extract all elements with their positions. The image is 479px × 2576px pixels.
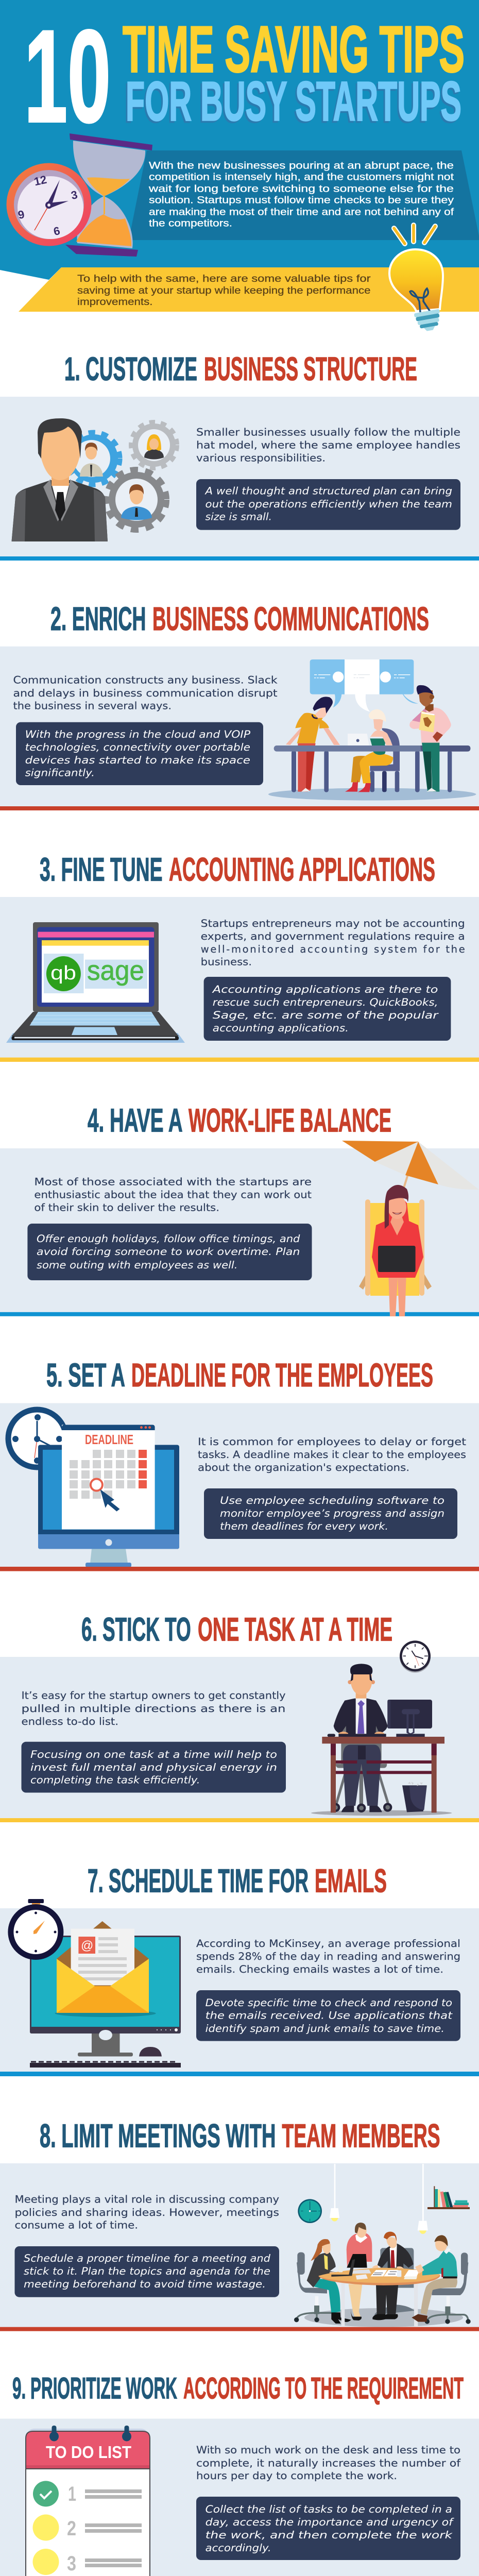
text 5 bbox=[198, 1436, 466, 1473]
text 4: enthusiastic about the idea that they can work out bbox=[34, 1189, 312, 1201]
section 8 bbox=[0, 2117, 479, 2331]
callout 9 bbox=[196, 2497, 460, 2560]
callout 9: accordingly. bbox=[206, 2542, 271, 2554]
callout 1: A well thought and structured plan can bring bbox=[204, 485, 452, 497]
callout 2: With the progress in the cloud and VOIP bbox=[25, 728, 250, 740]
callout 7: Devote specific time to check and respond to bbox=[206, 1997, 452, 2009]
intro text: competition is intensely high, and the customers might not bbox=[149, 172, 454, 183]
title bbox=[24, 3, 465, 150]
text 3: well-monitored accounting system for the bbox=[201, 943, 465, 955]
wall clock bbox=[298, 2199, 322, 2223]
text 8: policies and sharing ideas. However, meetings bbox=[14, 2207, 279, 2218]
text 2: the business in several ways. bbox=[13, 700, 172, 711]
icon: hourglass bbox=[65, 133, 152, 257]
callout 6: invest full mental and physical energy in bbox=[30, 1761, 277, 1773]
yellow band text: saving time at your startup while keeping the performance bbox=[77, 285, 371, 296]
seated person bbox=[345, 709, 393, 792]
section 6 bbox=[0, 1611, 479, 1822]
checked item: 1 bbox=[68, 2483, 76, 2505]
text 7: According to McKinsey, an average professional bbox=[196, 1938, 460, 1950]
callout 5: monitor employee’s progress and assign bbox=[220, 1507, 444, 1519]
intro text: With the new businesses pouring at an abrupt pace, the bbox=[149, 160, 454, 172]
illustration: man at desk bbox=[311, 1640, 452, 1816]
desk monitor bbox=[387, 1700, 432, 1737]
chair behind center man bbox=[374, 2248, 415, 2315]
gear: light grey bbox=[131, 422, 177, 468]
section 7 bbox=[0, 1862, 479, 2076]
callout 2: technologies, connectivity over portable bbox=[25, 741, 250, 753]
floor shadow bbox=[311, 1810, 452, 1816]
deadline calendar: DEADLINE bbox=[85, 1432, 133, 1447]
section 3 bbox=[0, 851, 479, 1062]
desk bbox=[322, 1737, 444, 1812]
beach chair bbox=[359, 1199, 432, 1296]
right person bbox=[409, 685, 451, 792]
text 4: of their skin to deliver the results. bbox=[34, 1201, 219, 1214]
item 2: 2 bbox=[67, 2517, 76, 2540]
yellow intro band bbox=[19, 267, 479, 312]
left person bbox=[286, 697, 340, 792]
text 3 bbox=[201, 918, 465, 968]
callout 2 bbox=[16, 722, 263, 785]
text 5: about the organization's expectations. bbox=[198, 1462, 409, 1473]
callout 7: identify spam and junk emails to save time. bbox=[206, 2023, 444, 2035]
clock numerals bbox=[17, 173, 79, 238]
heading 9: 9. PRIORITIZE WORK bbox=[12, 2372, 177, 2405]
callout 4: Offer enough holidays, follow office timings, and bbox=[37, 1233, 300, 1245]
yellow band text: To help with the same, here are some valuable tips for bbox=[77, 273, 371, 284]
text 8: Meeting plays a vital role in discussing company bbox=[14, 2194, 279, 2206]
waste bin bbox=[402, 1782, 427, 1812]
text 1 bbox=[196, 427, 460, 464]
illustration: email on monitor bbox=[11, 1899, 181, 2067]
illustration: laptop with accounting logos bbox=[6, 922, 185, 1043]
speech bubbles bbox=[310, 659, 418, 712]
item 2 bbox=[33, 2514, 142, 2541]
chair left bbox=[294, 2252, 331, 2322]
man right bbox=[412, 2235, 457, 2322]
item 3: 3 bbox=[67, 2552, 76, 2575]
callout 1: out the operations efficiently when the team bbox=[205, 498, 452, 510]
text 1: various responsibilities. bbox=[196, 452, 326, 464]
gear: dark grey bbox=[107, 470, 166, 530]
icon: light bulb bbox=[389, 225, 443, 333]
heading 4 bbox=[88, 1101, 391, 1139]
illustration: to do list bbox=[26, 2426, 150, 2576]
text 7: spends 28% of the day in reading and answering bbox=[196, 1951, 460, 1962]
heading 5: 5. SET A bbox=[46, 1357, 125, 1394]
chair bbox=[370, 728, 400, 792]
gear: blue bbox=[68, 433, 119, 484]
text 1: hat model, where the same employee handles bbox=[196, 439, 460, 451]
title number 10: 10 bbox=[24, 3, 111, 150]
header: blue background bbox=[0, 0, 479, 280]
callout 9: day, access the importance and urgency of bbox=[206, 2516, 455, 2528]
heading 2 bbox=[50, 600, 429, 637]
callout 3: Sage, etc. are some of the popular bbox=[213, 1009, 439, 1021]
callout 8: stick to it. Plan the topics and agenda for the bbox=[24, 2265, 270, 2277]
stopwatch bbox=[11, 1899, 61, 1957]
callout 1: size is small. bbox=[205, 511, 272, 523]
callout 2: devices has started to make its space bbox=[25, 754, 250, 766]
callout 5: Use employee scheduling software to bbox=[220, 1495, 444, 1506]
desk back legs and bars bbox=[336, 1760, 432, 1774]
text 9: complete, it naturally increases the number of bbox=[196, 2458, 461, 2469]
keyboard and mouse bbox=[328, 1734, 386, 1737]
table items bbox=[331, 2259, 420, 2280]
woman seated bbox=[307, 2239, 351, 2324]
text 9: With so much work on the desk and less time to bbox=[196, 2444, 460, 2456]
binder rings bbox=[49, 2426, 131, 2441]
callout 5: them deadlines for every work. bbox=[220, 1520, 388, 1532]
panel 2 background bbox=[0, 647, 479, 806]
heading 2: 2. ENRICH bbox=[50, 600, 146, 637]
callout 3: accounting applications. bbox=[213, 1022, 349, 1034]
text 7 bbox=[196, 1938, 460, 1975]
heading 1: 1. CUSTOMIZE bbox=[64, 350, 197, 387]
list title: TO DO LIST bbox=[46, 2443, 131, 2462]
intro text: the competitors. bbox=[149, 217, 232, 229]
text 3: Startups entrepreneurs may not be accounting bbox=[201, 918, 465, 929]
callout 2: significantly. bbox=[25, 767, 95, 779]
text 5: tasks. A deadline makes it clear to the employees bbox=[198, 1449, 466, 1461]
stripe 5 bbox=[0, 1567, 479, 1571]
heading 1 bbox=[64, 350, 417, 387]
clock numerals: 6 bbox=[53, 224, 61, 238]
section 9 bbox=[0, 2372, 479, 2576]
callout 5 bbox=[204, 1488, 457, 1539]
wall clock bbox=[8, 1410, 66, 1467]
clock numerals: 9 bbox=[17, 208, 26, 222]
text 3: business. bbox=[201, 956, 252, 968]
envelope bbox=[55, 1921, 156, 2017]
heading 7: 7. SCHEDULE TIME FOR bbox=[88, 1862, 309, 1899]
text 6: It’s easy for the startup owners to get constantly bbox=[22, 1690, 285, 1702]
checked item bbox=[33, 2481, 142, 2506]
yellow band text bbox=[77, 273, 371, 308]
text 8 bbox=[14, 2194, 279, 2231]
text 2: Communication constructs any business. Slack bbox=[13, 674, 278, 686]
callout 4: avoid forcing someone to work overtime. Plan bbox=[37, 1246, 300, 1258]
callout 3 bbox=[204, 977, 451, 1041]
text 4: Most of those associated with the startups are bbox=[34, 1176, 312, 1188]
callout 6 bbox=[22, 1742, 286, 1793]
heading 6: 6. STICK TO bbox=[81, 1611, 191, 1648]
man center bbox=[372, 2232, 414, 2320]
text 6: pulled in multiple directions as there is an bbox=[22, 1703, 285, 1715]
clock numerals: 3 bbox=[70, 188, 79, 202]
logo: sage: sage bbox=[87, 955, 144, 986]
wall clock bbox=[400, 1640, 431, 1673]
bookshelf bbox=[427, 2186, 470, 2209]
callout 9: the work, and then complete the work bbox=[206, 2529, 453, 2541]
section 5 bbox=[0, 1357, 479, 1571]
callout 7: the emails received. Use applications that bbox=[206, 2010, 453, 2022]
panel 9 background bbox=[0, 2419, 479, 2576]
text 5: It is common for employees to delay or forget bbox=[198, 1436, 466, 1448]
icon: alarm clock bbox=[6, 163, 92, 246]
stripe 8 bbox=[0, 2327, 479, 2331]
heading 3 bbox=[40, 851, 435, 888]
panel 4 background bbox=[0, 1148, 479, 1312]
computer bbox=[30, 1936, 181, 2067]
callout 1 bbox=[196, 479, 460, 530]
text 1: Smaller businesses usually follow the multiple bbox=[196, 427, 460, 438]
heading 9 bbox=[12, 2372, 464, 2405]
section 2 bbox=[0, 600, 479, 810]
panel 1 background bbox=[0, 397, 479, 556]
callout 9: Collect the list of tasks to be completed in a bbox=[206, 2503, 452, 2515]
callout 8: Schedule a proper timeline for a meeting and bbox=[24, 2252, 271, 2264]
table bbox=[274, 745, 470, 792]
section 4 bbox=[0, 1101, 479, 1316]
intro text: are making the most of their time and are not behind any of bbox=[149, 206, 454, 217]
text 7: emails. Checking emails wastes a lot of time. bbox=[196, 1963, 443, 1975]
mouse cursor bbox=[100, 1489, 119, 1512]
callout 4 bbox=[27, 1224, 312, 1280]
callout 3: Accounting applications are there to bbox=[211, 984, 438, 995]
man's legs bbox=[341, 1745, 382, 1812]
bars over legs bbox=[343, 1760, 381, 1774]
heading 6 bbox=[81, 1611, 392, 1648]
callout 8: meeting beforehand to avoid time wastage. bbox=[24, 2278, 266, 2290]
callout 3: rescue such entrepreneurs. QuickBooks, bbox=[213, 996, 438, 1008]
illustration: deadline calendar on monitor bbox=[8, 1410, 179, 1567]
section 1 bbox=[0, 350, 479, 561]
laptop bbox=[348, 734, 369, 745]
floor shadow bbox=[268, 788, 476, 801]
text 9 bbox=[196, 2444, 461, 2482]
callout 7 bbox=[196, 1990, 460, 2041]
hanging lamps bbox=[330, 2164, 428, 2234]
heading 3: 3. FINE TUNE bbox=[40, 851, 163, 888]
clock numerals: 12 bbox=[33, 173, 48, 188]
heading 8: 8. LIMIT MEETINGS WITH bbox=[40, 2117, 276, 2155]
deadline calendar bbox=[62, 1425, 155, 1529]
chair right bbox=[425, 2252, 471, 2324]
text 6: endless to-do list. bbox=[22, 1716, 118, 1727]
monitor bbox=[38, 1445, 179, 1567]
callout 6: Focusing on one task at a time will help to bbox=[30, 1749, 277, 1760]
logo: QuickBooks: qb bbox=[50, 962, 76, 984]
text 2: and delays in business communication disrupt bbox=[13, 687, 278, 699]
text 9: hours per day to complete the work. bbox=[196, 2470, 397, 2482]
intro text: solution. Startups must follow time checks to be sure they bbox=[149, 195, 454, 206]
man upper body bbox=[334, 1664, 388, 1737]
floor shadow bbox=[304, 2308, 463, 2327]
panel 6 background bbox=[0, 1657, 479, 1818]
businessman bbox=[11, 418, 108, 541]
heading 4: 4. HAVE A bbox=[88, 1101, 183, 1139]
text 2 bbox=[13, 674, 278, 711]
panel 8 background bbox=[0, 2163, 479, 2327]
illustration: manager with gears bbox=[11, 418, 177, 541]
illustration: team meeting with speech bubbles bbox=[268, 659, 476, 801]
text 4 bbox=[34, 1176, 312, 1214]
panel 7 background bbox=[0, 1908, 479, 2072]
intro panel background bbox=[129, 150, 479, 240]
envelope: @ bbox=[81, 1939, 93, 1953]
intro text bbox=[148, 160, 454, 229]
text 6 bbox=[22, 1690, 285, 1727]
woman standing bbox=[347, 2223, 372, 2320]
text 3: experts, and government regulations require a bbox=[201, 930, 465, 942]
callout 4: some outing with employees as well. bbox=[37, 1259, 238, 1271]
heading 5 bbox=[46, 1357, 433, 1394]
panel 5 background bbox=[0, 1403, 479, 1567]
woman bbox=[372, 1185, 423, 1316]
logo: QuickBooks bbox=[46, 956, 81, 991]
text 8: consume a lot of time. bbox=[14, 2219, 138, 2231]
intro text: wait for long before switching to someone else for the bbox=[148, 183, 454, 195]
illustration: woman under beach umbrella bbox=[342, 1141, 479, 1316]
table bbox=[318, 2268, 440, 2326]
heading 7: EMAILS bbox=[315, 1862, 387, 1899]
item 3 bbox=[33, 2549, 142, 2575]
callout 6: completing the task efficiently. bbox=[30, 1774, 200, 1786]
office chair bbox=[331, 1712, 392, 1812]
callout 8 bbox=[14, 2246, 279, 2297]
panel 3 background bbox=[0, 897, 479, 1058]
illustration: round-table meeting bbox=[294, 2164, 471, 2327]
yellow band text: improvements. bbox=[77, 296, 152, 308]
umbrella bbox=[342, 1141, 479, 1211]
